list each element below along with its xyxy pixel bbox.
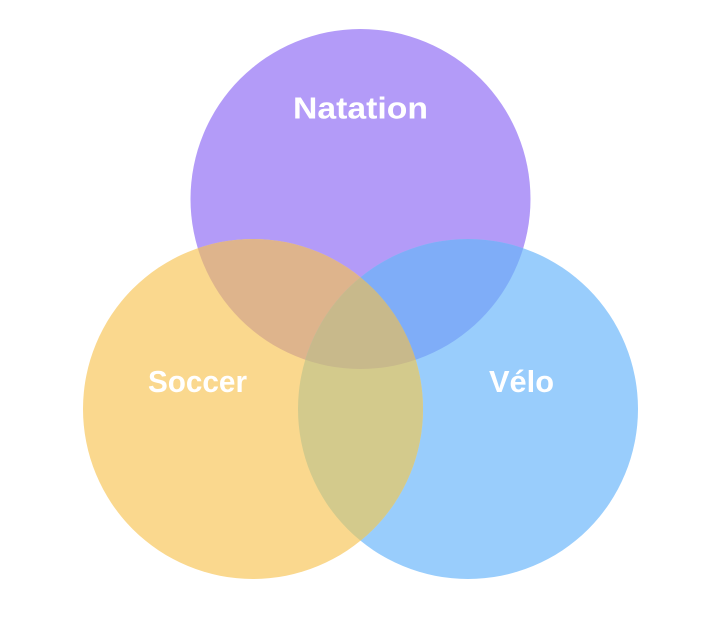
label: Soccer: Soccer (148, 364, 247, 399)
circle: Soccer (83, 239, 423, 579)
venn diagram (83, 29, 638, 579)
label: Vélo: Vélo (489, 364, 554, 399)
circle: Vélo (298, 239, 638, 579)
overlap: Natation and Vélo (305, 239, 524, 360)
circle: Natation (190, 29, 530, 369)
label: Natation: Natation (293, 90, 428, 126)
overlap: Soccer and Vélo (298, 278, 423, 540)
overlap: Natation and Soccer (198, 239, 360, 360)
overlap: all three (306, 278, 416, 369)
